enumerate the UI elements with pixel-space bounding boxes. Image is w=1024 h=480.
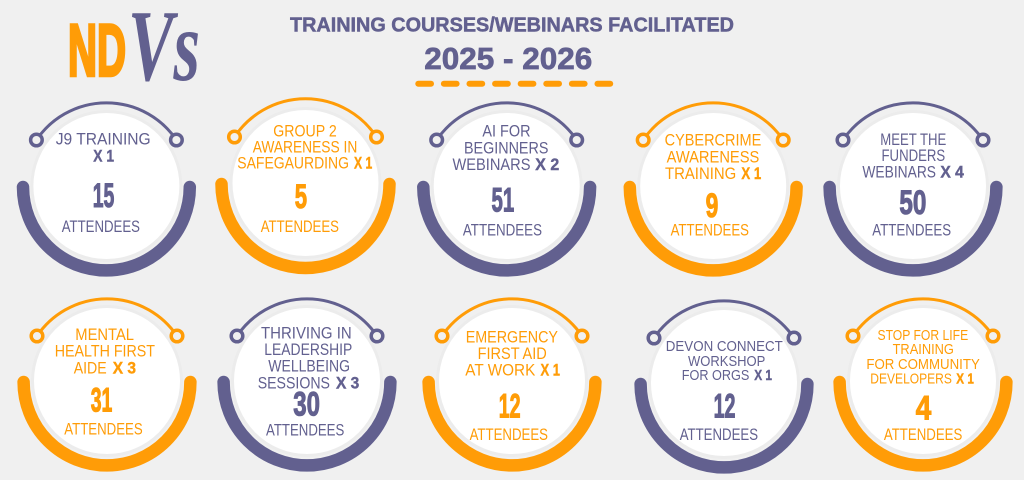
panel: Cybercrime Awareness [630, 103, 797, 270]
attendee count: 5 [295, 178, 307, 216]
attendees label: ATTENDEES [261, 218, 339, 236]
course name: LEADERSHIP [264, 341, 352, 359]
attendee count: 9 [706, 187, 718, 225]
panel: Meet the Funders [830, 103, 996, 270]
panel: Thriving in Leadership [224, 299, 390, 465]
course name [55, 326, 155, 377]
attendee count: 12 [499, 387, 521, 425]
subtitle: year range: 2025 - 2026 [424, 42, 592, 76]
course name: WORKSHOP [688, 354, 765, 370]
course name: X 3 [336, 374, 359, 392]
course name: X 2 [535, 156, 559, 174]
badge ring [224, 299, 390, 465]
course name [452, 123, 559, 174]
panel: Emergency First Aid [429, 299, 595, 465]
course name [465, 328, 560, 380]
course name [666, 339, 783, 384]
course name [862, 131, 964, 181]
attendees label: ATTENDEES [463, 222, 542, 240]
course name: AIDE [74, 359, 107, 377]
course name: STOP FOR LIFE [878, 328, 968, 344]
course name: SESSIONS [258, 374, 330, 392]
panel: AI for Beginners [423, 103, 590, 270]
panel: Mental Health First Aide [24, 299, 190, 465]
course name: AWARENESS IN [253, 139, 357, 157]
course name: DEVELOPERS [870, 371, 952, 387]
panel: Stop for Life Training [840, 299, 1006, 465]
course name: X 1 [540, 362, 560, 380]
course name: CYBERCRIME [665, 132, 761, 150]
panel: J9 Training [23, 103, 190, 270]
attendees label: ATTENDEES [266, 422, 344, 440]
course name: AT WORK [465, 362, 535, 380]
course name: THRIVING IN [261, 324, 352, 342]
course name: AI FOR [482, 123, 530, 141]
course name: WEBINARS [452, 156, 531, 174]
panel: Devon Connect Workshop [641, 301, 807, 467]
badge ring [830, 103, 996, 270]
course name: WELLBEING [268, 358, 350, 376]
course name [56, 130, 151, 166]
badge ring [24, 299, 190, 465]
course name: X 3 [113, 359, 136, 377]
course name: MENTAL [75, 326, 134, 344]
dashed underline [415, 81, 613, 87]
course name: FOR COMMUNITY [866, 357, 980, 373]
course name [258, 324, 359, 392]
course name: X 1 [354, 155, 372, 173]
logo: NDVs [68, 0, 200, 103]
attendee count: 50 [899, 184, 926, 222]
title: TRAINING COURSES/WEBINARS FACILITATED [290, 14, 734, 37]
attendees label: ATTENDEES [680, 426, 758, 444]
course name: J9 TRAINING [56, 130, 151, 148]
attendee count: 15 [93, 177, 114, 215]
badge ring [630, 103, 797, 270]
course name: BEGINNERS [464, 139, 549, 157]
course name: X 1 [754, 368, 772, 384]
badge ring [222, 99, 390, 268]
course name: DEVON CONNECT [666, 339, 783, 355]
course name [665, 132, 761, 183]
course name: AWARENESS [667, 148, 759, 166]
badge ring [429, 299, 595, 465]
course name: WEBINARS [862, 163, 936, 181]
attendees label: ATTENDEES [671, 222, 749, 240]
course name: SAFEGAURDING [237, 155, 349, 173]
badge ring [840, 299, 1006, 465]
logo: NDVs: ND [68, 10, 126, 92]
course name: GROUP 2 [273, 123, 337, 141]
badge ring [23, 103, 190, 270]
course name: TRAINING [665, 165, 736, 183]
badge ring [423, 103, 590, 270]
attendees label: ATTENDEES [884, 426, 962, 444]
attendee count: 31 [91, 381, 112, 419]
course name: MEET THE [880, 131, 946, 149]
course name: TRAINING [893, 342, 954, 358]
course name: FOR ORGS [682, 368, 750, 384]
course name: HEALTH FIRST [55, 343, 155, 361]
course name [237, 123, 372, 173]
course name: X 4 [940, 163, 964, 181]
course name: X 1 [741, 165, 761, 183]
attendee count: 12 [714, 387, 736, 425]
course name: EMERGENCY [466, 328, 558, 346]
attendee count: 30 [293, 385, 320, 423]
attendees label: ATTENDEES [872, 222, 951, 240]
course name: FIRST AID [478, 345, 547, 363]
attendee count: 51 [492, 181, 514, 219]
course name: FUNDERS [882, 147, 945, 165]
badge ring [641, 301, 807, 467]
attendees label: ATTENDEES [470, 426, 548, 444]
course name: X 1 [93, 148, 114, 166]
attendee count: 4 [916, 390, 931, 428]
attendees label: ATTENDEES [64, 420, 143, 438]
attendees label: ATTENDEES [62, 218, 140, 236]
course name [866, 328, 980, 387]
course name: X 1 [956, 371, 974, 387]
panel: Group 2 Awareness [222, 99, 390, 268]
